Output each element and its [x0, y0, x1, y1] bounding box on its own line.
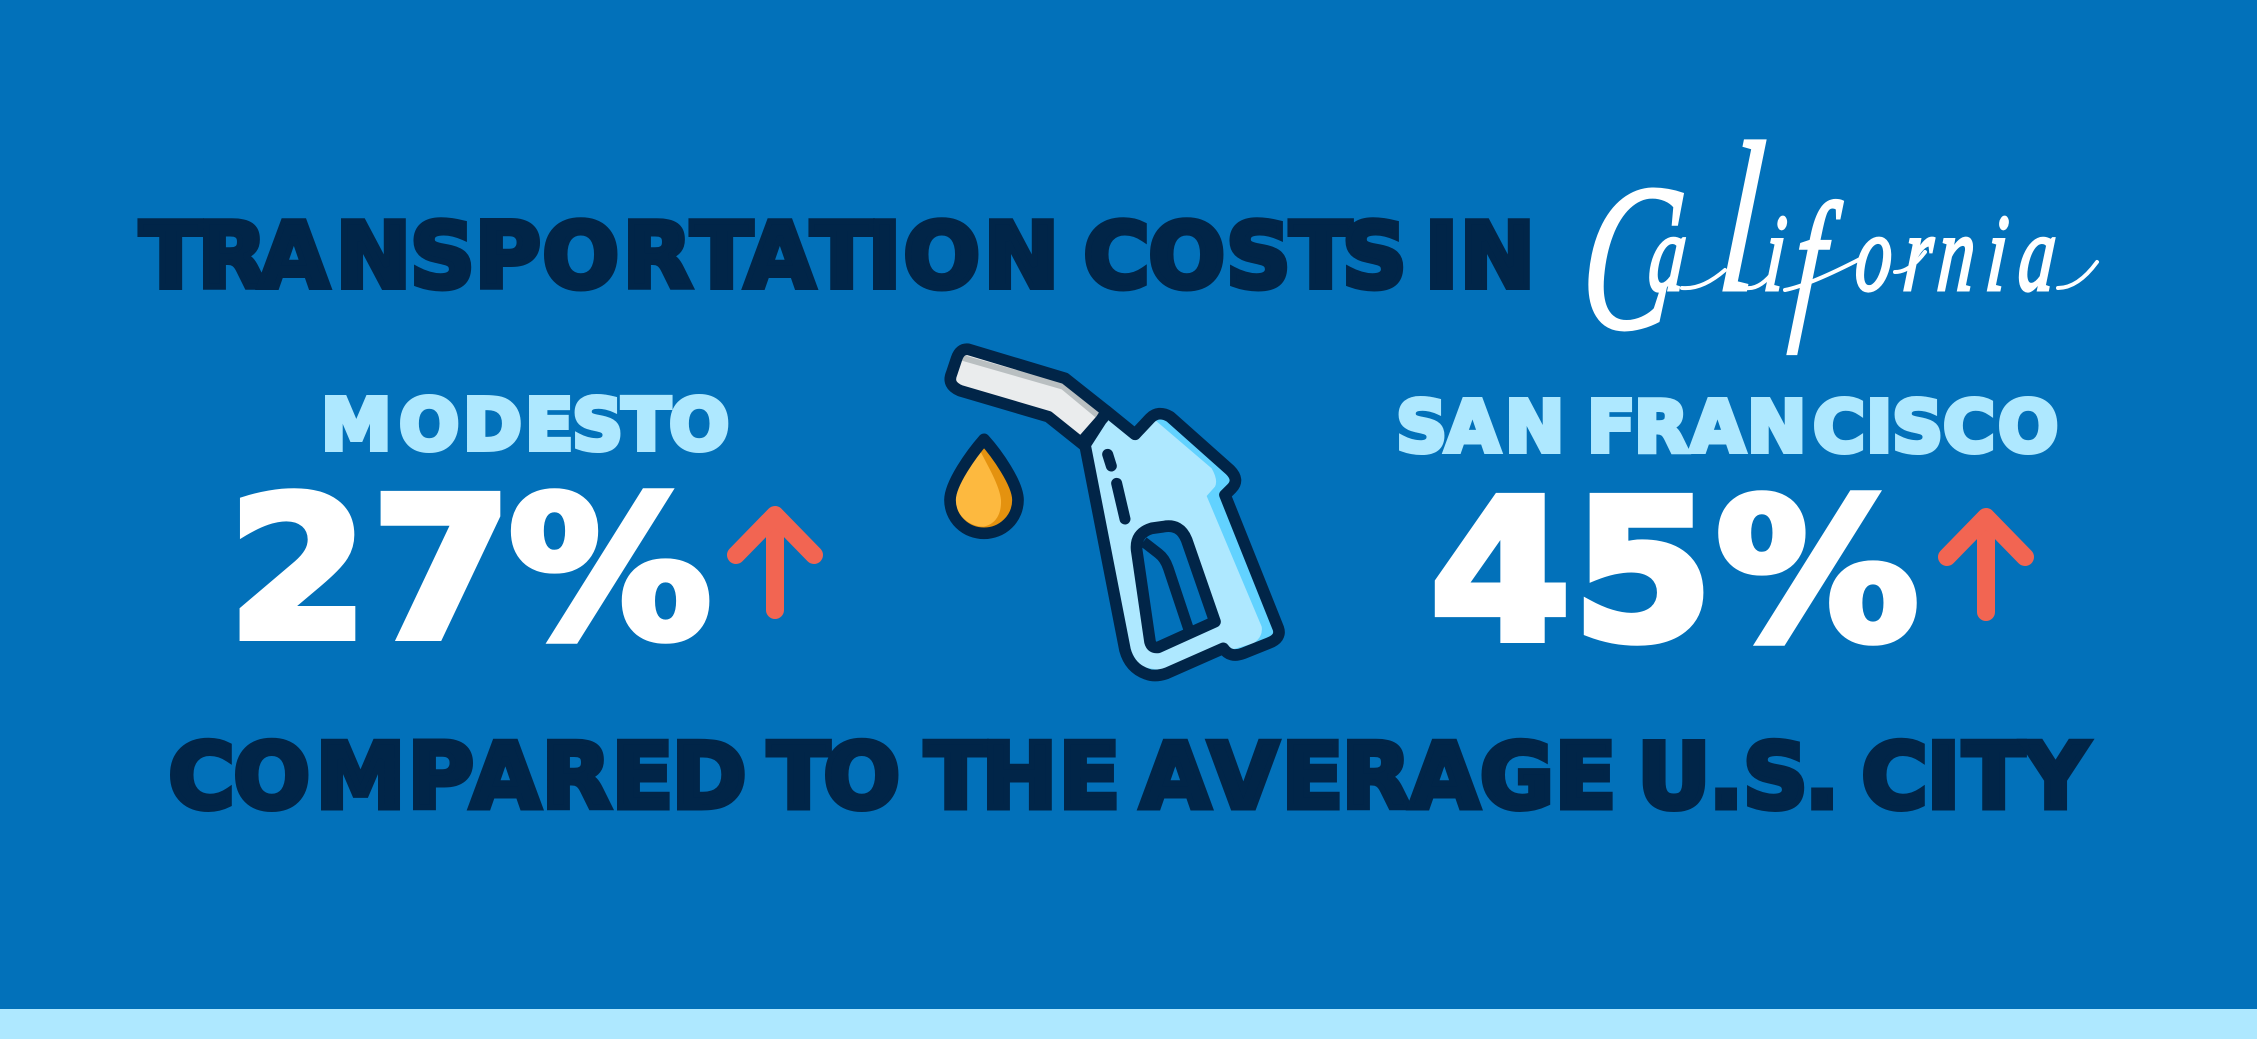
city label: Modesto: MODESTO: [321, 384, 729, 466]
title script word: California: [1573, 98, 2097, 374]
statistic: 27%: 27%: [228, 456, 712, 683]
title script word: California: f: [1786, 170, 1846, 354]
panel: San Francisco: [1396, 386, 2058, 685]
icon: fuel pump nozzle with drop: [950, 349, 1279, 676]
title script word: California: a: [1645, 193, 1691, 315]
fuel drop: [950, 439, 1018, 533]
caption: COMPARED TO THE AVERAGE U.S. CITY: [168, 725, 2090, 830]
title: TRANSPORTATION COSTS IN: [140, 204, 1535, 309]
nozzle spout: [950, 349, 1107, 446]
title script word: California: i: [1982, 193, 2013, 315]
nozzle handle: [1084, 411, 1279, 676]
panel: Modesto: [228, 384, 814, 683]
title script word: California: n: [1934, 193, 1981, 315]
title script word: California: a: [2014, 193, 2061, 315]
icon: up arrow: [1947, 517, 2025, 612]
title script word: California: l: [1712, 98, 1772, 337]
title script word: California: i: [1760, 193, 1791, 315]
icon: up arrow: [736, 515, 814, 610]
title script word: California: r: [1899, 193, 1939, 315]
city label: San Francisco: SAN FRANCISCO: [1396, 386, 2058, 468]
title script word: California: C: [1573, 141, 1688, 374]
bottom light-blue band: [0, 1009, 2257, 1039]
title script word: California: o: [1851, 193, 1898, 315]
statistic: 45%: 45%: [1430, 458, 1919, 685]
script connecting flourishes: [1682, 252, 2097, 290]
